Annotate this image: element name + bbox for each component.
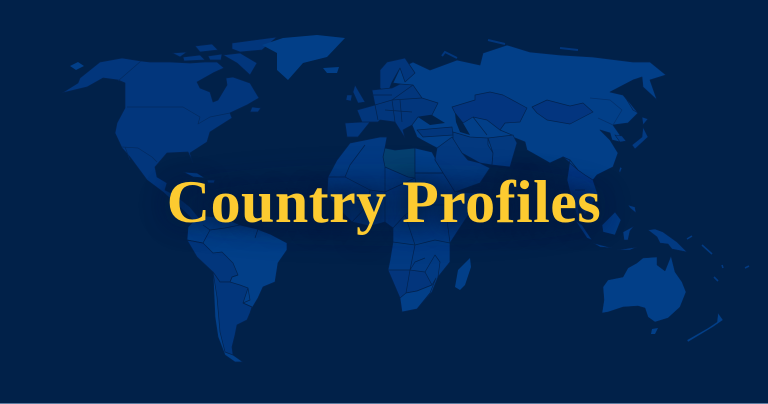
- Turkey: [417, 127, 453, 137]
- Japan and East Asian islands: [615, 97, 648, 173]
- North America: [62, 37, 277, 227]
- Black Sea: [418, 115, 445, 125]
- Mongolia: [532, 100, 593, 124]
- Scandinavia: [380, 58, 415, 95]
- South America: [187, 216, 287, 362]
- Kazakhstan: [452, 92, 527, 130]
- Iceland: [323, 67, 339, 73]
- New Zealand: [687, 313, 723, 342]
- Eurasia: [345, 45, 666, 225]
- Tasmania: [651, 328, 658, 334]
- Iran: [453, 132, 493, 165]
- Southeast Asia: [563, 157, 598, 225]
- Caspian Sea: [455, 113, 470, 135]
- Britain and Ireland: [346, 85, 365, 103]
- Central Asia and Pakistan: [488, 135, 517, 167]
- Madagascar: [455, 258, 471, 290]
- Africa: [327, 137, 483, 312]
- Pacific islands: [687, 236, 749, 281]
- Greenland: [262, 35, 345, 80]
- Arabia: [435, 137, 490, 192]
- title shade: [165, 179, 605, 231]
- Maritime Southeast Asia: [575, 205, 687, 252]
- title: Country Profiles: [167, 169, 601, 235]
- Europe countries: [345, 84, 438, 138]
- Russian Arctic islands: [442, 40, 578, 58]
- Australia: [602, 256, 686, 322]
